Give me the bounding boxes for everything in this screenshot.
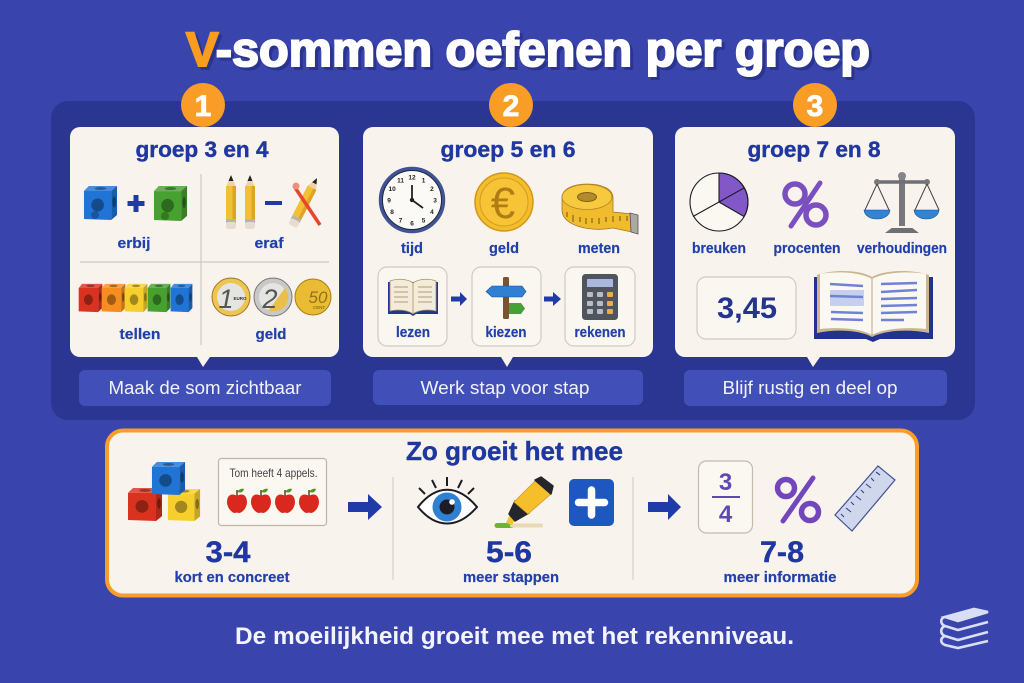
caption meer stappen: meer stappen	[463, 569, 559, 586]
icon: stack of books	[941, 609, 988, 648]
panel: groep 5 en 6	[363, 83, 653, 367]
icon: coins: EURO	[233, 296, 247, 301]
note card: Tom heeft 4 appels: Tom heeft 4 appels.	[230, 466, 318, 480]
card background 2	[363, 127, 653, 367]
icon: stacked cubes	[128, 462, 200, 521]
footer sentence: De moeilijkheid groeit mee met het rekenniveau.	[235, 623, 794, 650]
step: kiezen	[472, 267, 541, 346]
panel: Zo groeit het mee	[107, 430, 917, 596]
icon: open book	[814, 271, 933, 342]
icon: eye	[418, 477, 477, 524]
caption kort en concreet: kort en concreet	[174, 569, 290, 586]
decimal number box: 3,45	[717, 292, 777, 325]
stat 7-8: 7-8	[760, 536, 804, 569]
icon: balance scale	[864, 172, 939, 232]
callout: Maak de som zichtbaar: Maak de som zichtbaar	[108, 378, 302, 398]
icon: coins	[212, 278, 331, 316]
icon: clock: 8	[390, 209, 394, 216]
icon: ruler	[835, 466, 895, 531]
icon: clock: 1	[422, 178, 426, 184]
callout: Werk stap voor stap	[373, 370, 643, 405]
step: lezen: lezen	[396, 324, 430, 341]
stat 5-6: 5-6	[486, 536, 532, 569]
icon: coins: 1	[218, 284, 234, 314]
icon: coins: 2	[261, 284, 278, 314]
number badge 1	[181, 83, 225, 127]
callout: Maak de som zichtbaar	[79, 370, 331, 406]
callout: Werk stap voor stap: Werk stap voor stap	[420, 378, 590, 398]
label tijd: tijd	[401, 240, 423, 257]
step: rekenen	[565, 267, 635, 346]
icon: tape measure	[562, 184, 638, 234]
label verhoudingen: verhoudingen	[857, 240, 947, 257]
step: rekenen: rekenen	[574, 324, 626, 341]
heading groep 5 en 6: groep 5 en 6	[440, 137, 576, 162]
icon: percent small	[778, 478, 818, 521]
note card: Tom heeft 4 appels	[218, 458, 326, 526]
label geld coins: geld	[256, 326, 286, 343]
icon: clock: 12	[408, 174, 416, 182]
icon: clock: 6	[410, 220, 414, 228]
icon: highlighter	[497, 477, 553, 526]
label breuken: breuken	[692, 240, 746, 257]
number badge 3	[793, 83, 837, 127]
label erbij: erbij	[118, 235, 150, 252]
callout: Blijf rustig en deel op: Blijf rustig en deel op	[722, 378, 898, 398]
label procenten: procenten	[774, 240, 840, 257]
icon: fraction card	[698, 461, 752, 533]
callout: Blijf rustig en deel op	[684, 370, 947, 406]
title: V-sommen oefenen per groep	[186, 24, 870, 77]
icon: fraction card: 3	[719, 469, 732, 496]
icon: euro coin	[475, 173, 533, 231]
icon: clock	[380, 168, 444, 232]
icon: fraction card: 4	[719, 501, 733, 528]
number badge 3: 3	[807, 90, 823, 123]
icon: coins: 50	[309, 288, 328, 307]
icon: clock: 9	[387, 198, 391, 204]
heading groep 3 en 4: groep 3 en 4	[136, 137, 269, 162]
heading groep 7 en 8: groep 7 en 8	[748, 137, 880, 162]
icon: euro coin: €	[491, 179, 515, 228]
icon: percent	[785, 183, 826, 226]
panel: groups background	[51, 101, 975, 420]
card background 1	[70, 127, 339, 367]
arrow step 2	[544, 292, 561, 306]
step: kiezen: kiezen	[486, 324, 526, 341]
heading Zo groeit het mee: Zo groeit het mee	[406, 436, 623, 466]
label tellen: tellen	[120, 326, 160, 343]
label meten: meten	[578, 240, 620, 257]
grid dividers	[80, 174, 329, 345]
title: V-sommen oefenen per groep	[189, 27, 873, 80]
card background 3	[675, 127, 955, 367]
stat 3-4: 3-4	[206, 536, 251, 569]
decimal number box	[697, 277, 796, 339]
icon: eraf pencils	[226, 175, 321, 229]
caption meer informatie: meer informatie	[724, 569, 836, 586]
icon: clock: 7	[399, 217, 403, 224]
icon: clock: 11	[397, 178, 404, 184]
icon: clock: 4	[430, 209, 434, 216]
arrow step 1	[451, 292, 467, 306]
icon: clock: 10	[388, 186, 396, 193]
icon: pie chart	[690, 173, 748, 231]
icon: coins: CENT	[313, 305, 325, 310]
label geld: geld	[489, 240, 519, 257]
icon: plus box	[569, 479, 614, 526]
arrow 2	[648, 494, 681, 520]
panel frame	[107, 430, 917, 596]
number badge 2: 2	[503, 90, 519, 123]
icon: clock: 3	[433, 198, 437, 204]
number badge 2	[489, 83, 533, 127]
icon: clock: 2	[430, 186, 434, 193]
number badge 1: 1	[195, 90, 211, 123]
panel: groep 3 en 4	[70, 83, 339, 367]
icon: erbij cubes	[84, 186, 187, 221]
label eraf: eraf	[254, 235, 285, 252]
icon: counting cubes	[79, 284, 192, 312]
step: lezen	[378, 267, 447, 346]
divider lines	[393, 477, 633, 580]
arrow 1	[348, 494, 382, 520]
panel: groep 7 en 8	[675, 83, 955, 367]
icon: clock: 5	[422, 217, 426, 224]
